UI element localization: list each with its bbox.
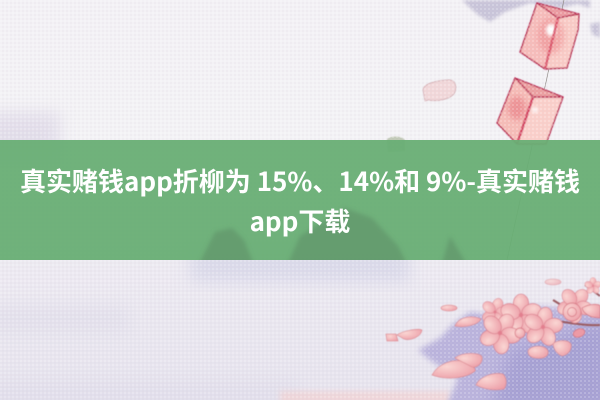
- rose and buds: [515, 303, 600, 339]
- pink wash: bottom: [280, 391, 450, 400]
- lantern string: [507, 0, 564, 260]
- lavender wash: bottom right: [418, 306, 600, 400]
- lavender wash: left bands: [0, 305, 300, 400]
- branch: [550, 285, 600, 325]
- icon: small faded petal: [387, 136, 405, 152]
- lavender wash: top right: [462, 0, 600, 38]
- title: app下载: [250, 202, 350, 239]
- icon: upper red lantern: [520, 3, 579, 69]
- lavender wash: left edge: [0, 112, 60, 162]
- cherry blossom branch: [386, 277, 600, 390]
- blossoms: [470, 277, 600, 363]
- green title banner: [0, 140, 600, 260]
- shaded hills seen through the banner: [200, 208, 464, 260]
- fallen petals: [386, 279, 571, 390]
- title: [20, 162, 580, 239]
- icon: lower red lantern: [497, 78, 563, 144]
- lavender wash: under banner: [190, 250, 410, 282]
- title: 真实赌钱app折柳为 15%、14%和 9%-真实赌钱: [20, 162, 580, 199]
- icon: floating petal: [423, 80, 456, 101]
